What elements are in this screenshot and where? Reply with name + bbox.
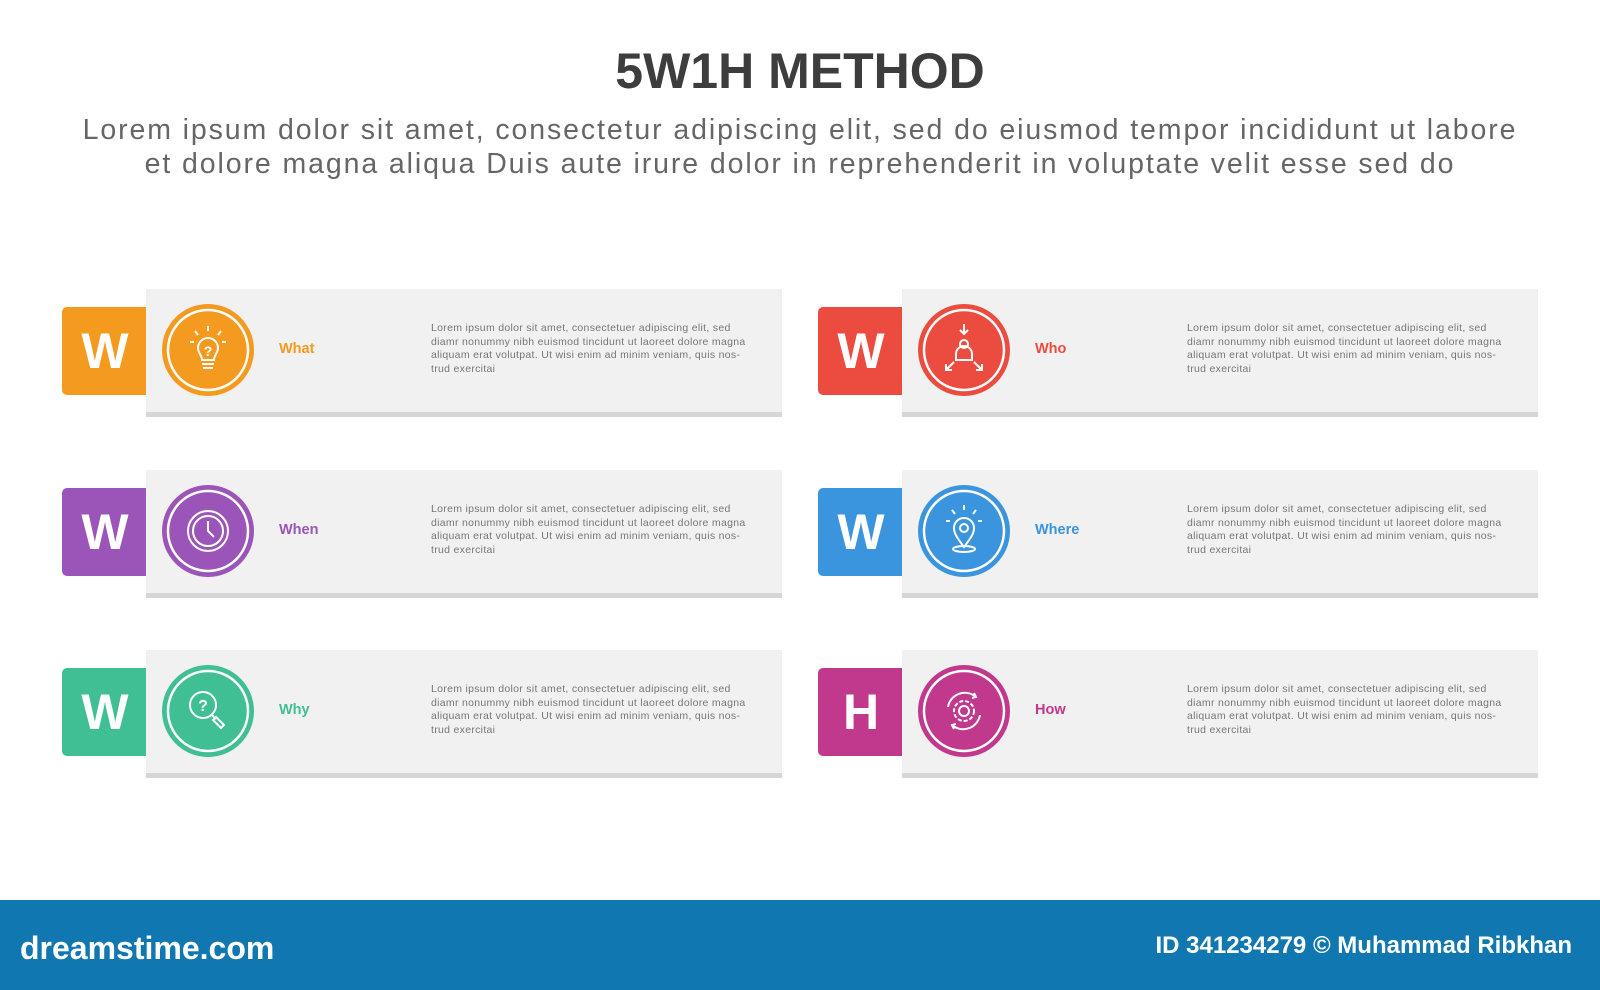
text: Lorem ipsum dolor sit amet, consectetuer adipiscing elit, sed — [431, 322, 731, 334]
label: What — [279, 341, 314, 357]
label: Where — [1035, 522, 1079, 538]
text: diamr nonummy nibh euismod tincidunt ut laoreet dolore magna — [1187, 336, 1502, 348]
letter badge: W — [837, 504, 885, 560]
text: diamr nonummy nibh euismod tincidunt ut laoreet dolore magna — [1187, 696, 1502, 708]
subtitle — [83, 114, 1517, 180]
text: diamr nonummy nibh euismod tincidunt ut laoreet dolore magna — [1187, 516, 1502, 528]
letter badge: W — [81, 684, 129, 740]
text: aliquam erat volutpat. Ut wisi enim ad minim veniam, quis nos- — [431, 710, 740, 722]
footer banner — [0, 900, 1600, 990]
icon: magnifier question — [162, 665, 254, 757]
panel: where — [818, 470, 1538, 598]
text: aliquam erat volutpat. Ut wisi enim ad minim veniam, quis nos- — [1187, 349, 1496, 361]
text — [1187, 322, 1502, 374]
text: diamr nonummy nibh euismod tincidunt ut laoreet dolore magna — [431, 336, 746, 348]
letter badge — [62, 668, 148, 756]
icon: magnifier question: ? — [198, 698, 208, 715]
text: trud exercitai — [431, 362, 495, 374]
icon: clock — [162, 485, 254, 577]
letter badge — [818, 307, 904, 395]
text: Lorem ipsum dolor sit amet, consectetuer adipiscing elit, sed — [431, 683, 731, 695]
text: Lorem ipsum dolor sit amet, consectetuer adipiscing elit, sed — [1187, 503, 1487, 515]
icon: person — [918, 304, 1010, 396]
text: Lorem ipsum dolor sit amet, consectetuer adipiscing elit, sed — [431, 503, 731, 515]
title: 5W1H METHOD — [615, 43, 985, 99]
letter badge: W — [81, 504, 129, 560]
text: Lorem ipsum dolor sit amet, consectetuer adipiscing elit, sed — [1187, 322, 1487, 334]
footer logo: dreamstime.com — [20, 930, 274, 966]
icon: gear — [918, 665, 1010, 757]
text: aliquam erat volutpat. Ut wisi enim ad minim veniam, quis nos- — [1187, 530, 1496, 542]
text: aliquam erat volutpat. Ut wisi enim ad minim veniam, quis nos- — [1187, 710, 1496, 722]
subtitle: et dolore magna aliqua Duis aute irure dolor in reprehenderit in voluptate velit esse sed do — [145, 148, 1455, 180]
text: aliquam erat volutpat. Ut wisi enim ad minim veniam, quis nos- — [431, 349, 740, 361]
text — [431, 503, 746, 556]
text: trud exercitai — [1187, 724, 1251, 736]
text: diamr nonummy nibh euismod tincidunt ut laoreet dolore magna — [431, 696, 746, 708]
footer credit: ID 341234279 © Muhammad Ribkhan — [1155, 932, 1572, 959]
panel: how — [818, 650, 1538, 778]
letter badge — [818, 488, 904, 576]
label: Why — [279, 702, 310, 718]
letter badge: H — [843, 684, 879, 740]
letter badge: W — [81, 323, 129, 379]
letter badge — [62, 307, 148, 395]
icon: location pin — [918, 485, 1010, 577]
text: trud exercitai — [1187, 362, 1251, 374]
icon: lightbulb: ? — [204, 343, 212, 359]
text: trud exercitai — [431, 544, 495, 556]
panel: who — [818, 289, 1538, 417]
letter badge: W — [837, 323, 885, 379]
label: When — [279, 522, 318, 538]
letter badge — [818, 668, 904, 756]
text — [1187, 683, 1502, 736]
text: diamr nonummy nibh euismod tincidunt ut laoreet dolore magna — [431, 516, 746, 528]
icon: lightbulb — [162, 304, 254, 396]
text: trud exercitai — [431, 724, 495, 736]
text — [1187, 503, 1502, 556]
panel: when — [62, 470, 782, 598]
letter badge — [62, 488, 148, 576]
text: aliquam erat volutpat. Ut wisi enim ad minim veniam, quis nos- — [431, 530, 740, 542]
text: Lorem ipsum dolor sit amet, consectetuer adipiscing elit, sed — [1187, 683, 1487, 695]
text: trud exercitai — [1187, 544, 1251, 556]
text — [431, 322, 746, 374]
label: Who — [1035, 341, 1066, 357]
text — [431, 683, 746, 736]
panel: why — [62, 650, 782, 778]
label: How — [1035, 702, 1066, 718]
panel: what — [62, 289, 782, 417]
subtitle: Lorem ipsum dolor sit amet, consectetur adipiscing elit, sed do eiusmod tempor incididunt ut labore — [83, 114, 1517, 146]
